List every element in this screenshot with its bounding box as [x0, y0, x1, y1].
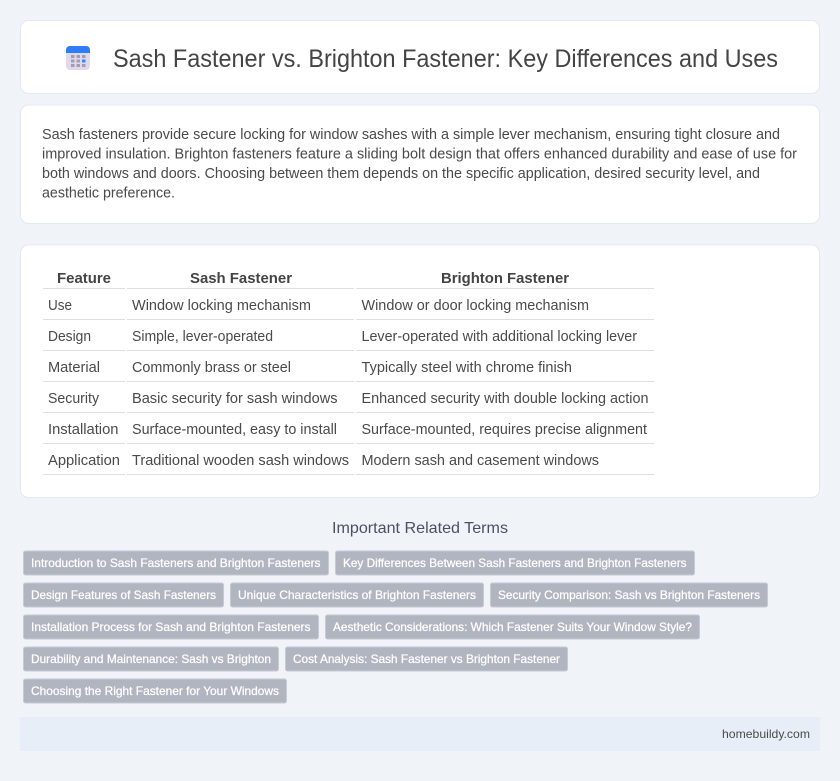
chip: introduction: Introduction to Sash Fasteners and Brighton Fasteners — [31, 556, 320, 570]
panel: header — [20, 20, 820, 94]
chip: aesthetic considerations: Aesthetic Considerations: Which Fastener Suits Your Window Style? — [333, 620, 692, 634]
table row: material: Typically steel with chrome finish — [362, 360, 572, 376]
table row: application — [48, 453, 599, 469]
chip: unique characteristics: Unique Characteristics of Brighton Fasteners — [238, 588, 476, 602]
text block: introduction paragraph — [42, 127, 797, 202]
table row: design: Design — [48, 329, 91, 345]
table row: installation: Installation — [48, 422, 118, 438]
table header row: Brighton Fastener — [441, 270, 569, 287]
title: Sash Fastener vs. Brighton Fastener: Key Differences and Uses — [113, 45, 778, 73]
chip: key differences — [336, 551, 694, 575]
text block: introduction paragraph: improved insulation. Brighton fasteners feature a sliding bolt design that offers enhanced durability and ease of use for — [42, 146, 797, 162]
footer: homebuildy.com — [722, 727, 810, 741]
chip: security comparison: Security Comparison: Sash vs Brighton Fasteners — [498, 588, 760, 602]
text block: introduction paragraph: Sash fasteners provide secure locking for window sashes with a simple lever mechanism, ensuring tight closure and — [42, 127, 780, 143]
table row: design: Simple, lever-operated — [132, 329, 273, 345]
table row: installation: Surface-mounted, easy to install — [132, 422, 337, 438]
chip: choosing — [24, 679, 286, 703]
table row: use: Window or door locking mechanism — [362, 298, 589, 314]
table row: material: Material — [48, 360, 100, 376]
table row: application: Application — [48, 453, 120, 469]
icon: calendar — [66, 46, 90, 70]
chip: installation process — [24, 615, 318, 639]
chip: key differences: Key Differences Between Sash Fasteners and Brighton Fasteners — [343, 556, 686, 570]
table row: design: Lever-operated with additional locking lever — [362, 329, 637, 345]
table row: installation: Surface-mounted, requires precise alignment — [362, 422, 647, 438]
chip: unique characteristics — [230, 583, 484, 607]
heading: important related terms: Important Related Terms — [332, 520, 508, 537]
table row: security: Basic security for sash windows — [132, 391, 338, 407]
text block: introduction paragraph: both windows and doors. Choosing between them depends on the specific application, desired security level, and — [42, 166, 760, 182]
table row: material — [48, 360, 572, 376]
chip: choosing: Choosing the Right Fastener for Your Windows — [31, 684, 279, 698]
panel: comparison table — [20, 245, 820, 498]
text block: introduction paragraph: aesthetic preference. — [42, 186, 175, 202]
table row: application: Modern sash and casement windows — [362, 453, 599, 469]
table row: installation — [48, 422, 647, 438]
panel: introduction — [20, 105, 820, 224]
chip group: related terms — [24, 551, 768, 703]
table header row: Sash Fastener — [190, 270, 292, 287]
table row: security — [48, 391, 648, 407]
table header row — [57, 270, 569, 287]
chip: introduction — [24, 551, 328, 575]
chip: installation process: Installation Process for Sash and Brighton Fasteners — [31, 620, 310, 634]
chip: durability — [24, 647, 278, 671]
chip: cost analysis — [286, 647, 568, 671]
table row: use: Use — [48, 298, 72, 314]
table row: use: Window locking mechanism — [132, 298, 311, 314]
table row: material: Commonly brass or steel — [132, 360, 291, 376]
footer — [20, 717, 820, 751]
table row: design — [48, 329, 637, 345]
table row: use — [48, 298, 589, 314]
table row: security: Enhanced security with double locking action — [362, 391, 648, 407]
table header row: Feature — [57, 270, 111, 287]
chip: aesthetic considerations — [326, 615, 700, 639]
chip: design features — [24, 583, 224, 607]
chip: security comparison — [490, 583, 768, 607]
chip: cost analysis: Cost Analysis: Sash Fastener vs Brighton Fastener — [293, 652, 560, 666]
table row: application: Traditional wooden sash windows — [132, 453, 349, 469]
chip: durability: Durability and Maintenance: Sash vs Brighton — [31, 652, 271, 666]
table row: security: Security — [48, 391, 100, 407]
chip: design features: Design Features of Sash Fasteners — [31, 588, 216, 602]
